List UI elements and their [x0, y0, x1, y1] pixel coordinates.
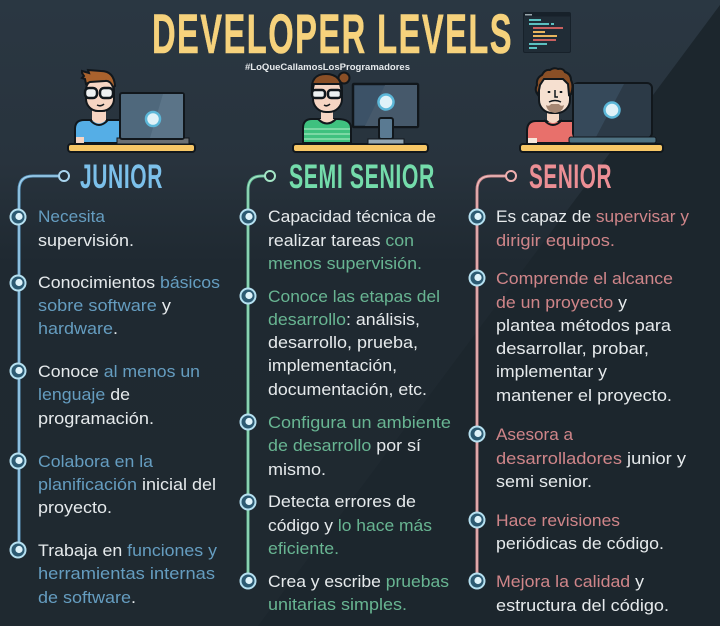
- illustration: semi senior developer: [293, 72, 428, 152]
- item 4: Hace revisiones: [496, 512, 620, 530]
- item 4: eficiente.: [268, 540, 339, 558]
- item 3: [10, 363, 200, 428]
- item 2: Conoce las etapas del: [268, 288, 440, 306]
- item 2: Comprende el alcance: [496, 270, 673, 288]
- illustration: junior developer: [68, 70, 195, 152]
- item 4: [470, 512, 664, 553]
- item 4: [10, 453, 216, 517]
- heading: semi senior: SEMI SENIOR: [289, 158, 435, 196]
- item 5: Crea y escribe pruebas: [268, 573, 449, 591]
- item 2: [240, 288, 440, 399]
- item 1: [10, 208, 134, 250]
- item 4: periódicas de código.: [496, 535, 664, 553]
- item 1: Es capaz de supervisar y: [496, 208, 690, 226]
- item 3: [240, 414, 451, 479]
- connector end: senior: [506, 171, 516, 181]
- item 5: unitarias simples.: [268, 596, 407, 614]
- heading: senior: SENIOR: [529, 158, 612, 196]
- item 3: [470, 426, 687, 491]
- item 3: Configura un ambiente: [268, 414, 451, 432]
- item 2: sobre software y: [38, 297, 172, 315]
- item 4: Colabora en la: [38, 453, 154, 471]
- panel: junior: [10, 158, 220, 607]
- item 5: estructura del código.: [496, 597, 669, 615]
- panel: semi senior: [240, 158, 451, 614]
- item 5: [240, 573, 449, 614]
- item 2: hardware .: [38, 320, 118, 338]
- item 2: Conocimientos básicos: [38, 274, 220, 292]
- item 5: herramientas internas: [38, 565, 215, 583]
- item 3: desarrolladores junior y: [496, 450, 687, 468]
- item 3: mismo.: [268, 461, 326, 479]
- item 5: [470, 573, 669, 615]
- item 3: Conoce al menos un: [38, 363, 200, 381]
- item 4: proyecto.: [38, 499, 112, 517]
- connector: semi senior: [248, 176, 265, 581]
- item 3: programación.: [38, 410, 154, 428]
- item 2: implementación,: [268, 357, 397, 375]
- item 2: [10, 274, 220, 338]
- connector end: junior: [59, 171, 69, 181]
- item 1: [470, 208, 690, 250]
- item 5: [10, 542, 218, 607]
- item 5: Mejora la calidad y: [496, 573, 645, 591]
- item 4: [240, 493, 432, 558]
- icon: code window: [524, 12, 570, 52]
- item 2: de un proyecto y: [496, 294, 628, 312]
- item 1: Capacidad técnica de: [268, 208, 436, 226]
- item 2: mantener el proyecto.: [496, 387, 672, 405]
- item 1: Necesita: [38, 208, 106, 226]
- item 4: planificación inicial del: [38, 476, 216, 494]
- item 3: semi senior.: [496, 473, 592, 491]
- item 4: código y lo hace más: [268, 517, 432, 535]
- item 2: plantea métodos para: [496, 317, 672, 335]
- item 2: desarrollo, prueba,: [268, 334, 418, 352]
- item 2: implementar y: [496, 363, 608, 381]
- item 2: [470, 270, 673, 405]
- item 3: lenguaje de: [38, 386, 130, 404]
- illustration: senior developer: [520, 68, 663, 152]
- item 2: desarrollo : análisis,: [268, 311, 420, 329]
- connector end: semi senior: [265, 171, 275, 181]
- item 3: Asesora a: [496, 426, 574, 444]
- connector: senior: [477, 176, 506, 581]
- item 2: desarrollar, probar,: [496, 340, 649, 358]
- connector: junior: [19, 176, 59, 550]
- item 1: [240, 208, 436, 273]
- item 1: dirigir equipos.: [496, 232, 615, 250]
- panel: senior: [470, 158, 690, 615]
- item 1: realizar tareas con: [268, 232, 414, 250]
- hashtag: #LoQueCallamosLosProgramadores: [245, 62, 410, 72]
- item 5: de software .: [38, 589, 136, 607]
- item 4: Detecta errores de: [268, 493, 416, 511]
- heading: junior: JUNIOR: [80, 158, 163, 196]
- item 3: de desarrollo por sí: [268, 437, 421, 455]
- item 2: documentación, etc.: [268, 381, 427, 399]
- item 1: supervisión.: [38, 232, 134, 250]
- item 1: menos supervisión.: [268, 255, 422, 273]
- item 5: Trabaja en funciones y: [38, 542, 218, 560]
